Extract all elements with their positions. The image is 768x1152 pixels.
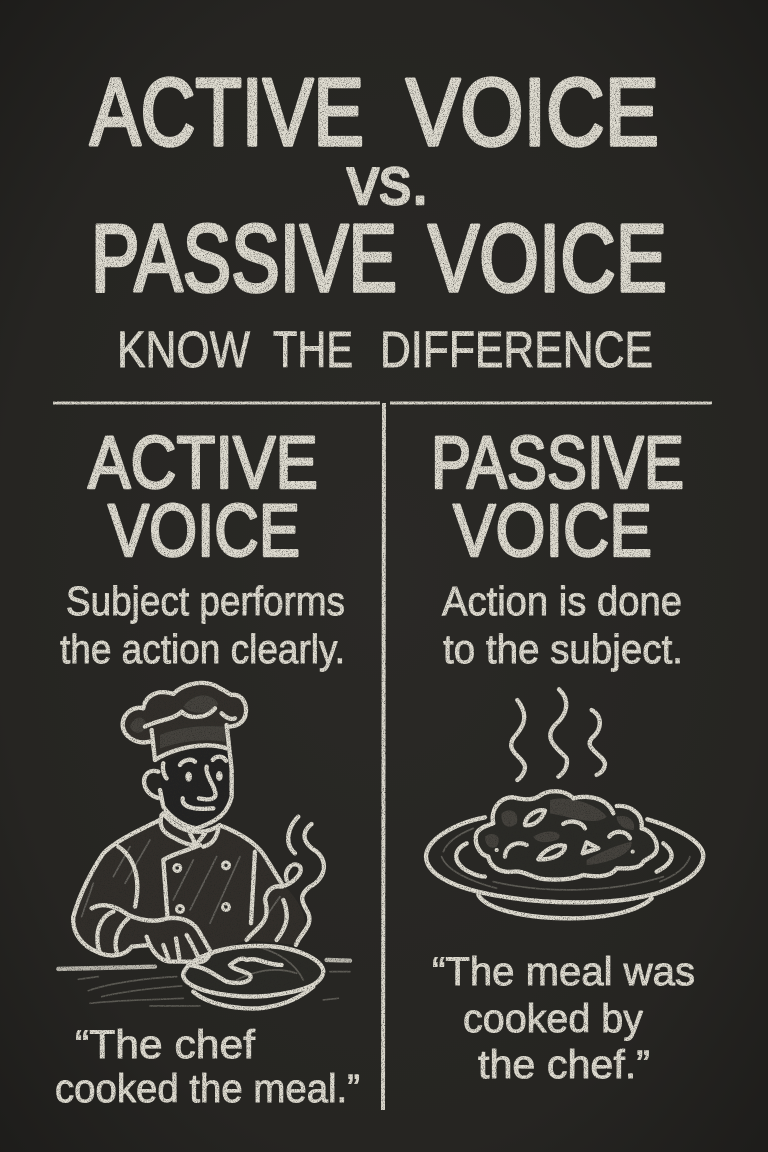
active voice description: the action clearly. <box>60 626 345 672</box>
plate shading <box>442 828 690 890</box>
steam <box>247 817 324 945</box>
passive voice example <box>432 950 695 1087</box>
active voice description: Subject performs <box>66 578 345 624</box>
panel heading: passive voice: PASSIVE <box>431 421 684 504</box>
active voice example: “The chef <box>75 1023 256 1067</box>
jacket buttons <box>174 862 229 912</box>
main chalk content <box>53 59 712 1111</box>
food specks <box>495 848 635 854</box>
panel heading: active voice <box>88 421 318 572</box>
food pieces <box>505 810 630 859</box>
title line: active voice: VOICE <box>406 59 659 166</box>
title block <box>90 59 667 378</box>
subtitle <box>117 321 653 378</box>
jacket hatching <box>82 840 303 980</box>
active voice description <box>60 578 345 672</box>
panel heading: passive voice <box>431 421 684 572</box>
passive voice example: “The meal was <box>432 950 695 994</box>
title line: passive voice: PASSIVE <box>91 205 397 312</box>
rising steam <box>511 689 605 780</box>
subtitle: THE <box>273 321 353 378</box>
panel heading: active voice: VOICE <box>108 489 300 572</box>
subtitle: KNOW <box>117 321 250 378</box>
vertical divider <box>383 403 384 1110</box>
passive voice example: the chef.” <box>478 1043 650 1087</box>
counter line <box>58 960 350 1006</box>
passive voice description: to the subject. <box>443 626 683 672</box>
food shading <box>485 799 634 865</box>
title line: active voice <box>90 59 659 166</box>
chef eyes <box>185 771 223 782</box>
bowl of food <box>183 946 323 1009</box>
passive voice description: Action is done <box>442 578 682 624</box>
chef hat <box>123 683 246 760</box>
active voice example <box>55 1023 360 1111</box>
title line: passive voice: VOICE <box>428 205 667 312</box>
food outline <box>476 791 657 880</box>
plate <box>426 817 703 918</box>
panel heading: active voice: ACTIVE <box>88 421 318 504</box>
chef head <box>144 725 232 828</box>
panel: passive voice <box>426 421 703 1087</box>
chef jacket <box>73 813 282 952</box>
icon: plate of food with steam <box>426 689 703 918</box>
panel: active voice <box>55 421 360 1111</box>
horizontal divider <box>53 402 712 404</box>
food pile <box>476 791 657 880</box>
panel heading: passive voice: VOICE <box>453 489 652 572</box>
title connector: vs.: vs. <box>347 143 429 219</box>
passive voice example: cooked by <box>463 997 643 1041</box>
title line: active voice: ACTIVE <box>90 59 364 166</box>
active voice example: cooked the meal.” <box>55 1067 360 1111</box>
passive voice description <box>442 578 683 672</box>
chef arm and hand <box>92 905 212 962</box>
chef shading <box>73 683 323 997</box>
subtitle: DIFFERENCE <box>380 321 653 378</box>
icon: chef cooking <box>58 683 350 1009</box>
